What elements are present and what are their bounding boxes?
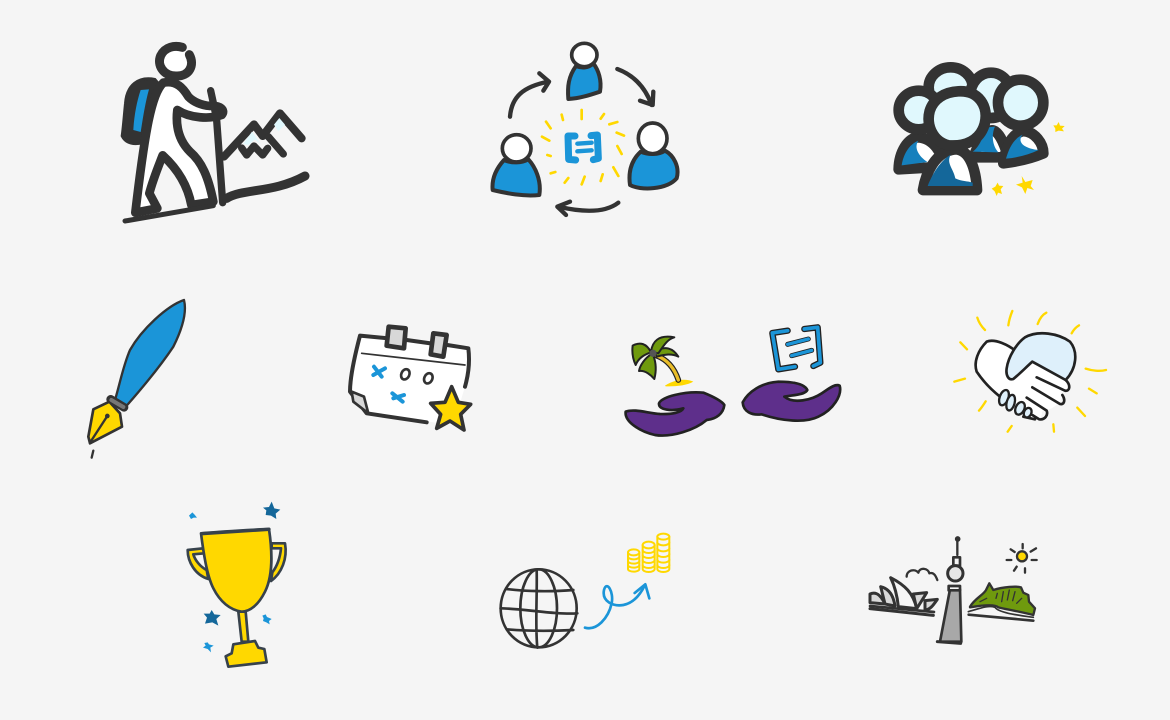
- opera house: [870, 578, 937, 615]
- coin stacks: [628, 534, 669, 572]
- cloud: [907, 569, 937, 580]
- palm tree: [632, 337, 693, 386]
- hand: left: [626, 392, 724, 436]
- stars: [992, 122, 1065, 196]
- heads: [899, 67, 1043, 129]
- icon: hands with island and logo: [626, 327, 840, 436]
- icon: trophy: [188, 502, 286, 667]
- marks: [373, 367, 404, 402]
- stars: [189, 502, 280, 652]
- rays: [542, 110, 624, 184]
- icon: hiker with mountains: [122, 46, 305, 221]
- sun: [1007, 544, 1037, 573]
- arrows: [510, 69, 653, 215]
- front person: [923, 91, 986, 190]
- icon: group of people: [899, 67, 1065, 196]
- icon: city landmarks: [870, 538, 1037, 643]
- table mountain: [968, 583, 1035, 621]
- tower: [937, 538, 963, 643]
- person: top: [568, 43, 601, 99]
- logo: brackets: [772, 327, 820, 369]
- icon: team cycle with logo: [492, 43, 678, 215]
- person: left: [492, 135, 540, 195]
- icon: calendar with star: [350, 327, 471, 430]
- icon: fountain pen: [88, 300, 185, 458]
- logo: [568, 135, 598, 160]
- icon: globe and coins: [501, 534, 669, 648]
- bodies: [899, 130, 1043, 169]
- rays: [954, 311, 1106, 432]
- icon: handshake heart: [954, 311, 1106, 432]
- arrow: [585, 584, 649, 628]
- globe: [501, 569, 577, 648]
- person: right: [629, 123, 678, 188]
- fingers: [997, 389, 1033, 419]
- hand: right: [743, 382, 840, 421]
